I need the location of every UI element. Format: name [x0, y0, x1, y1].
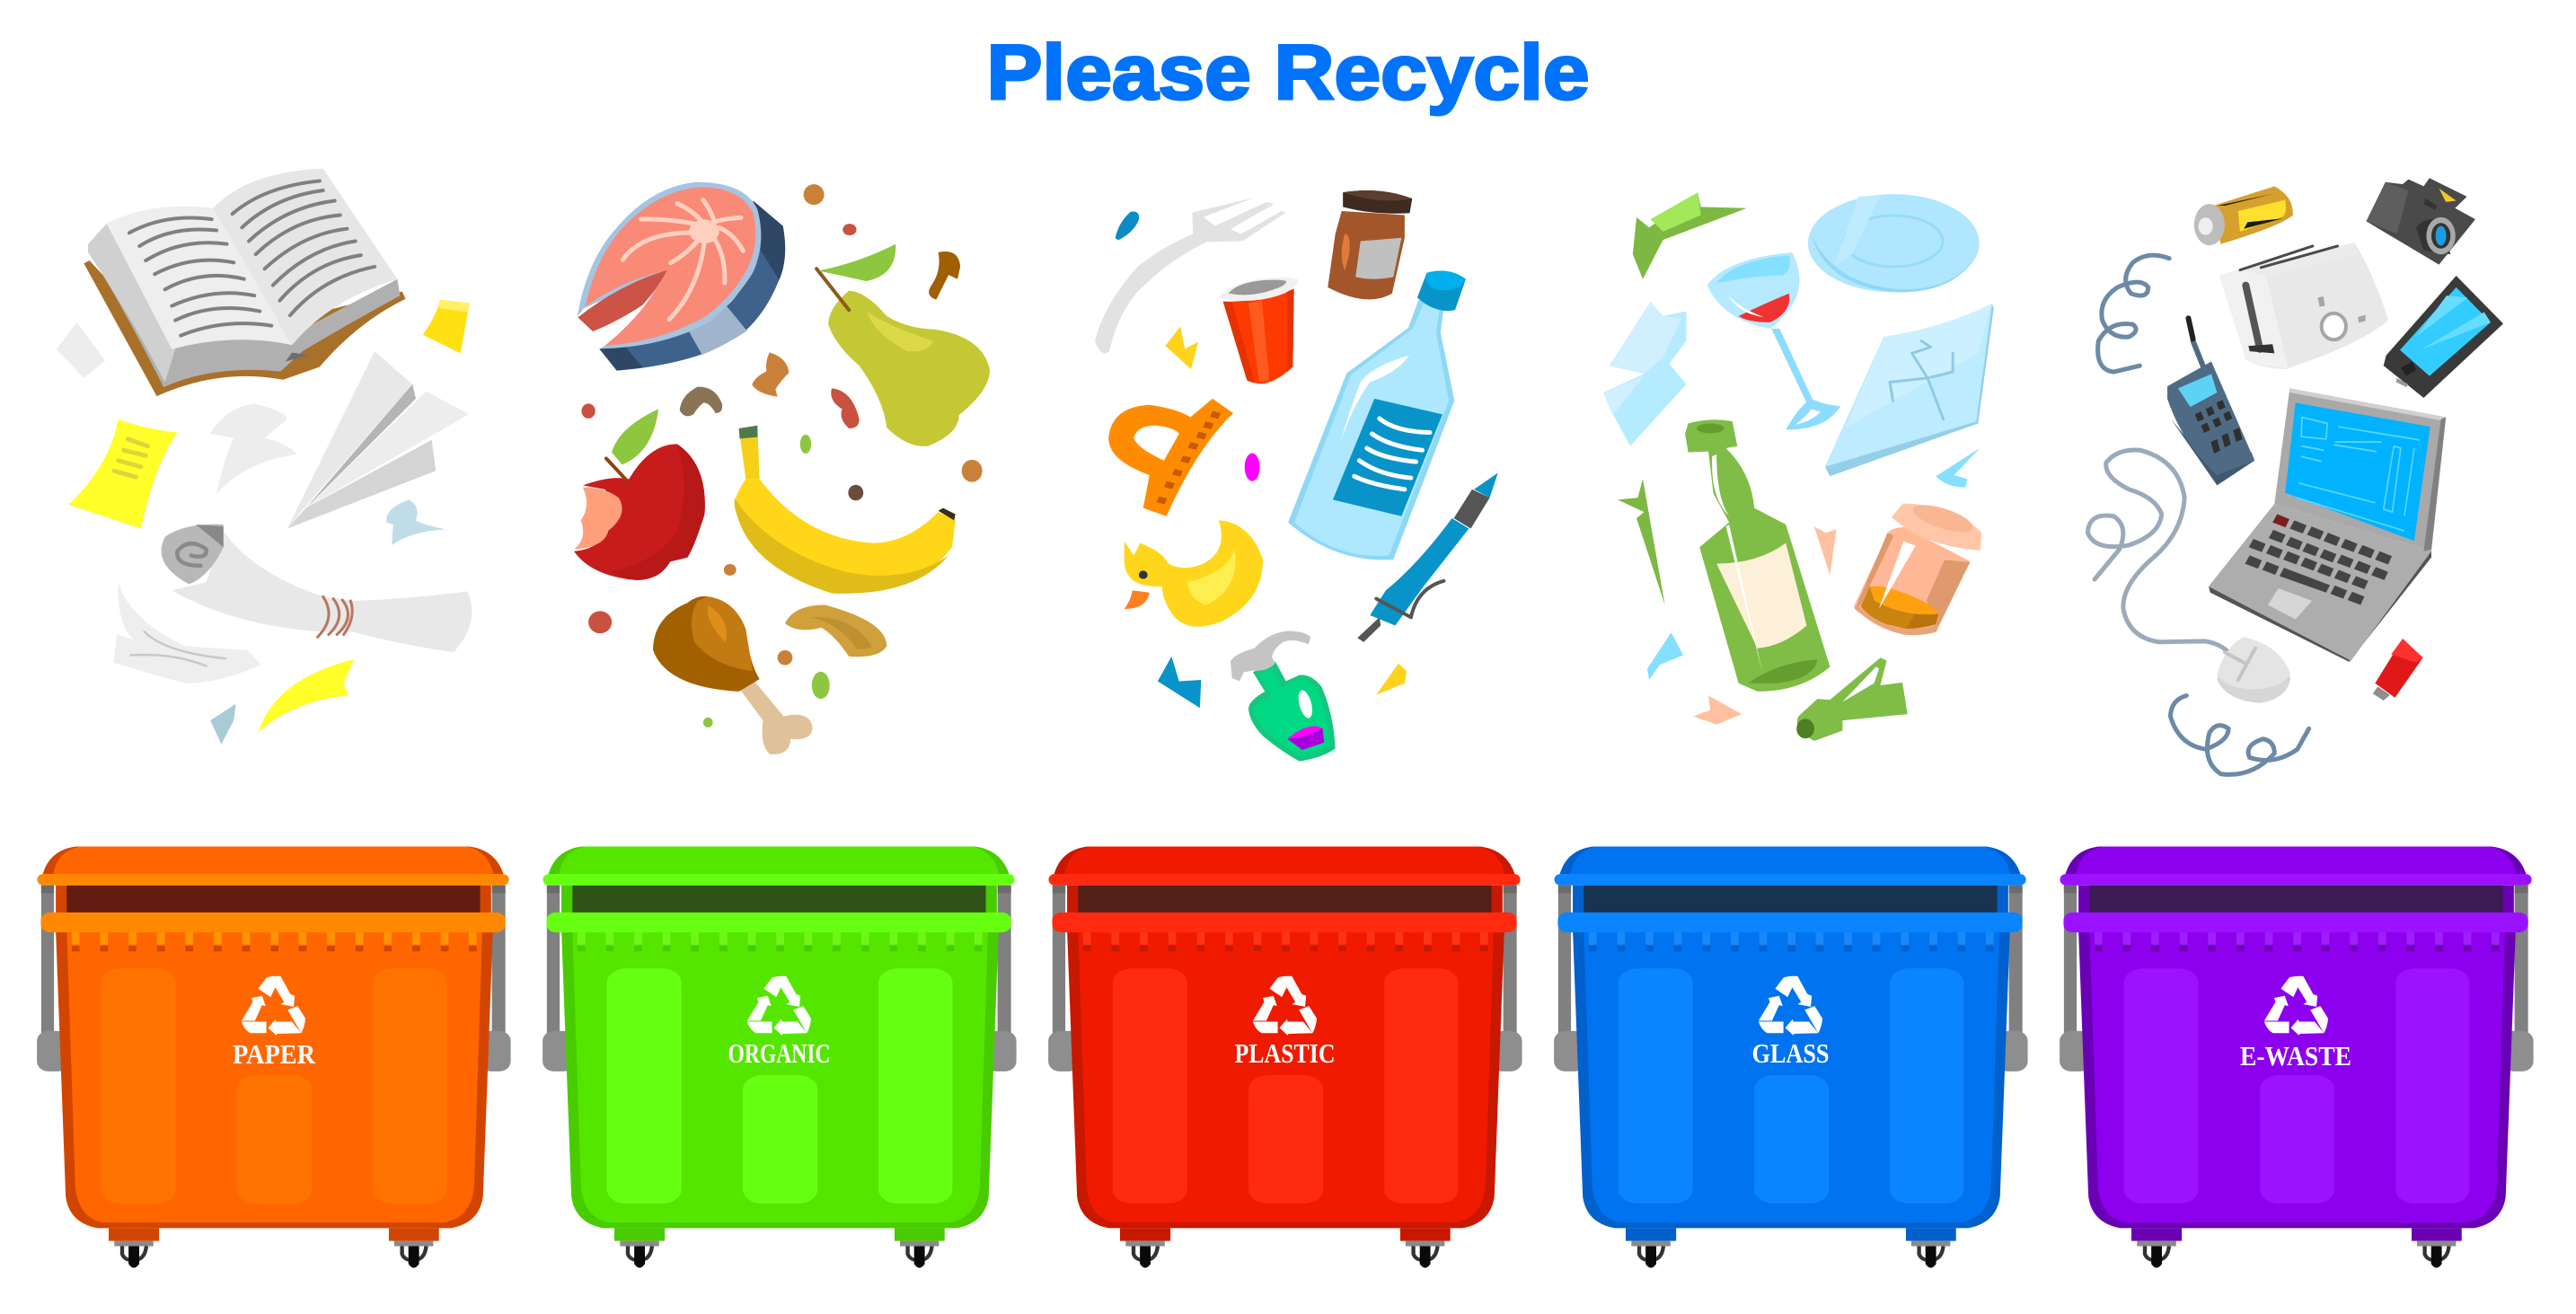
- title: Please Recycle: [986, 30, 1590, 116]
- icon: grey paper scrap: [57, 322, 105, 378]
- icon: bitten apple: [574, 409, 705, 580]
- bin: e-waste: [2060, 847, 2534, 1268]
- icon: small blue shard: [1647, 632, 1683, 680]
- icon: recycle symbol: [2264, 976, 2328, 1036]
- icon: water bottle: [1288, 271, 1466, 560]
- icon: torn paper: [209, 403, 297, 494]
- bin body: [1554, 847, 2028, 1268]
- icon: yellow plastic chip: [1376, 664, 1407, 695]
- label: PLASTIC: [1234, 1037, 1335, 1069]
- icon: spray bottle: [1231, 631, 1336, 762]
- icon: plastic pen: [1357, 473, 1498, 642]
- group: paper waste items: [57, 169, 472, 745]
- icon: cracked glass pane: [1825, 304, 1994, 476]
- bin: plastic: [1048, 847, 1522, 1268]
- icon: blue plastic shard: [1158, 657, 1201, 708]
- label: ORGANIC: [728, 1037, 830, 1069]
- icon: camera: [2367, 178, 2475, 265]
- icon: blue shard: [210, 704, 235, 745]
- icon: yellow plastic shard: [1165, 326, 1198, 369]
- icon: glass plate: [1808, 194, 1980, 292]
- icon: yellow curved scrap: [259, 659, 354, 732]
- group: plastic fork, cup and shard: [1095, 198, 1299, 384]
- bin: paper: [37, 847, 511, 1268]
- icon: green glass shard: [1633, 192, 1747, 279]
- icon: recycle symbol: [747, 976, 811, 1036]
- icon: recycle symbol: [242, 976, 305, 1036]
- icon: pale blue paper scrap: [386, 499, 446, 545]
- icon: broken wine glass: [1707, 252, 1840, 429]
- bin: glass: [1554, 847, 2028, 1268]
- icon: laptop: [2209, 388, 2446, 662]
- bin body: [37, 847, 511, 1268]
- icon: magenta drop: [1245, 454, 1260, 481]
- icon: yellow paper shard: [423, 300, 470, 353]
- icon: orange and brown scraps: [680, 352, 789, 416]
- bin body: [2060, 847, 2534, 1268]
- bin body: [1048, 847, 1522, 1268]
- bin: organic: [543, 847, 1017, 1268]
- icon: smartphone: [2384, 276, 2503, 398]
- group: plastic waste items: [1108, 190, 1498, 708]
- icon: chicken drumstick: [653, 596, 813, 754]
- icon: red cup: [1219, 278, 1299, 384]
- icon: green glass bottle: [1685, 419, 1830, 692]
- icon: small blue shard: [1936, 448, 1980, 488]
- icon: orange ruler: [1108, 399, 1233, 516]
- icon: cashew scrap: [785, 604, 887, 657]
- icon: plastic fork: [1095, 198, 1286, 354]
- icon: food scraps and crumbs: [581, 184, 983, 728]
- icon: peach glass jar: [1854, 499, 1981, 635]
- icon: open book: [84, 169, 406, 396]
- label: GLASS: [1751, 1037, 1829, 1069]
- icon: green glass splinter: [1618, 479, 1665, 604]
- icon: pear: [816, 244, 990, 446]
- icon: rubber duck: [1125, 520, 1263, 627]
- icon: yellow sticky note: [69, 419, 177, 529]
- icon: coiled cable: [2170, 696, 2309, 774]
- icon: recycle symbol: [1759, 976, 1822, 1036]
- icon: red USB drive: [2373, 639, 2423, 701]
- icon: peach shards: [1693, 526, 1836, 725]
- icon: cordless phone: [2167, 318, 2254, 485]
- icon: blue plastic drop: [1116, 211, 1139, 240]
- icon: brown jar: [1328, 190, 1412, 299]
- icon: coiled cable: [2098, 255, 2169, 372]
- icon: computer mouse: [2217, 637, 2290, 703]
- icon: pale glass shard: [1603, 302, 1686, 446]
- group: glass waste items: [1603, 192, 1994, 741]
- icon: salmon steak: [578, 182, 785, 371]
- icon: mouse cable: [2087, 450, 2228, 652]
- icon: broken bottle neck: [1796, 657, 1908, 741]
- icon: banana: [734, 426, 956, 594]
- icon: paper plane: [287, 351, 469, 529]
- icon: recycle symbol: [1253, 976, 1317, 1036]
- group: e-waste items: [2087, 178, 2503, 774]
- icon: rolled newspaper: [162, 525, 472, 652]
- bin body: [543, 847, 1017, 1268]
- icon: crumpled paper: [113, 582, 261, 683]
- label: E-WASTE: [2240, 1040, 2351, 1071]
- icon: battery: [2194, 186, 2293, 245]
- label: PAPER: [233, 1038, 316, 1070]
- icon: toaster: [2219, 243, 2388, 369]
- group: organic waste items: [574, 184, 990, 754]
